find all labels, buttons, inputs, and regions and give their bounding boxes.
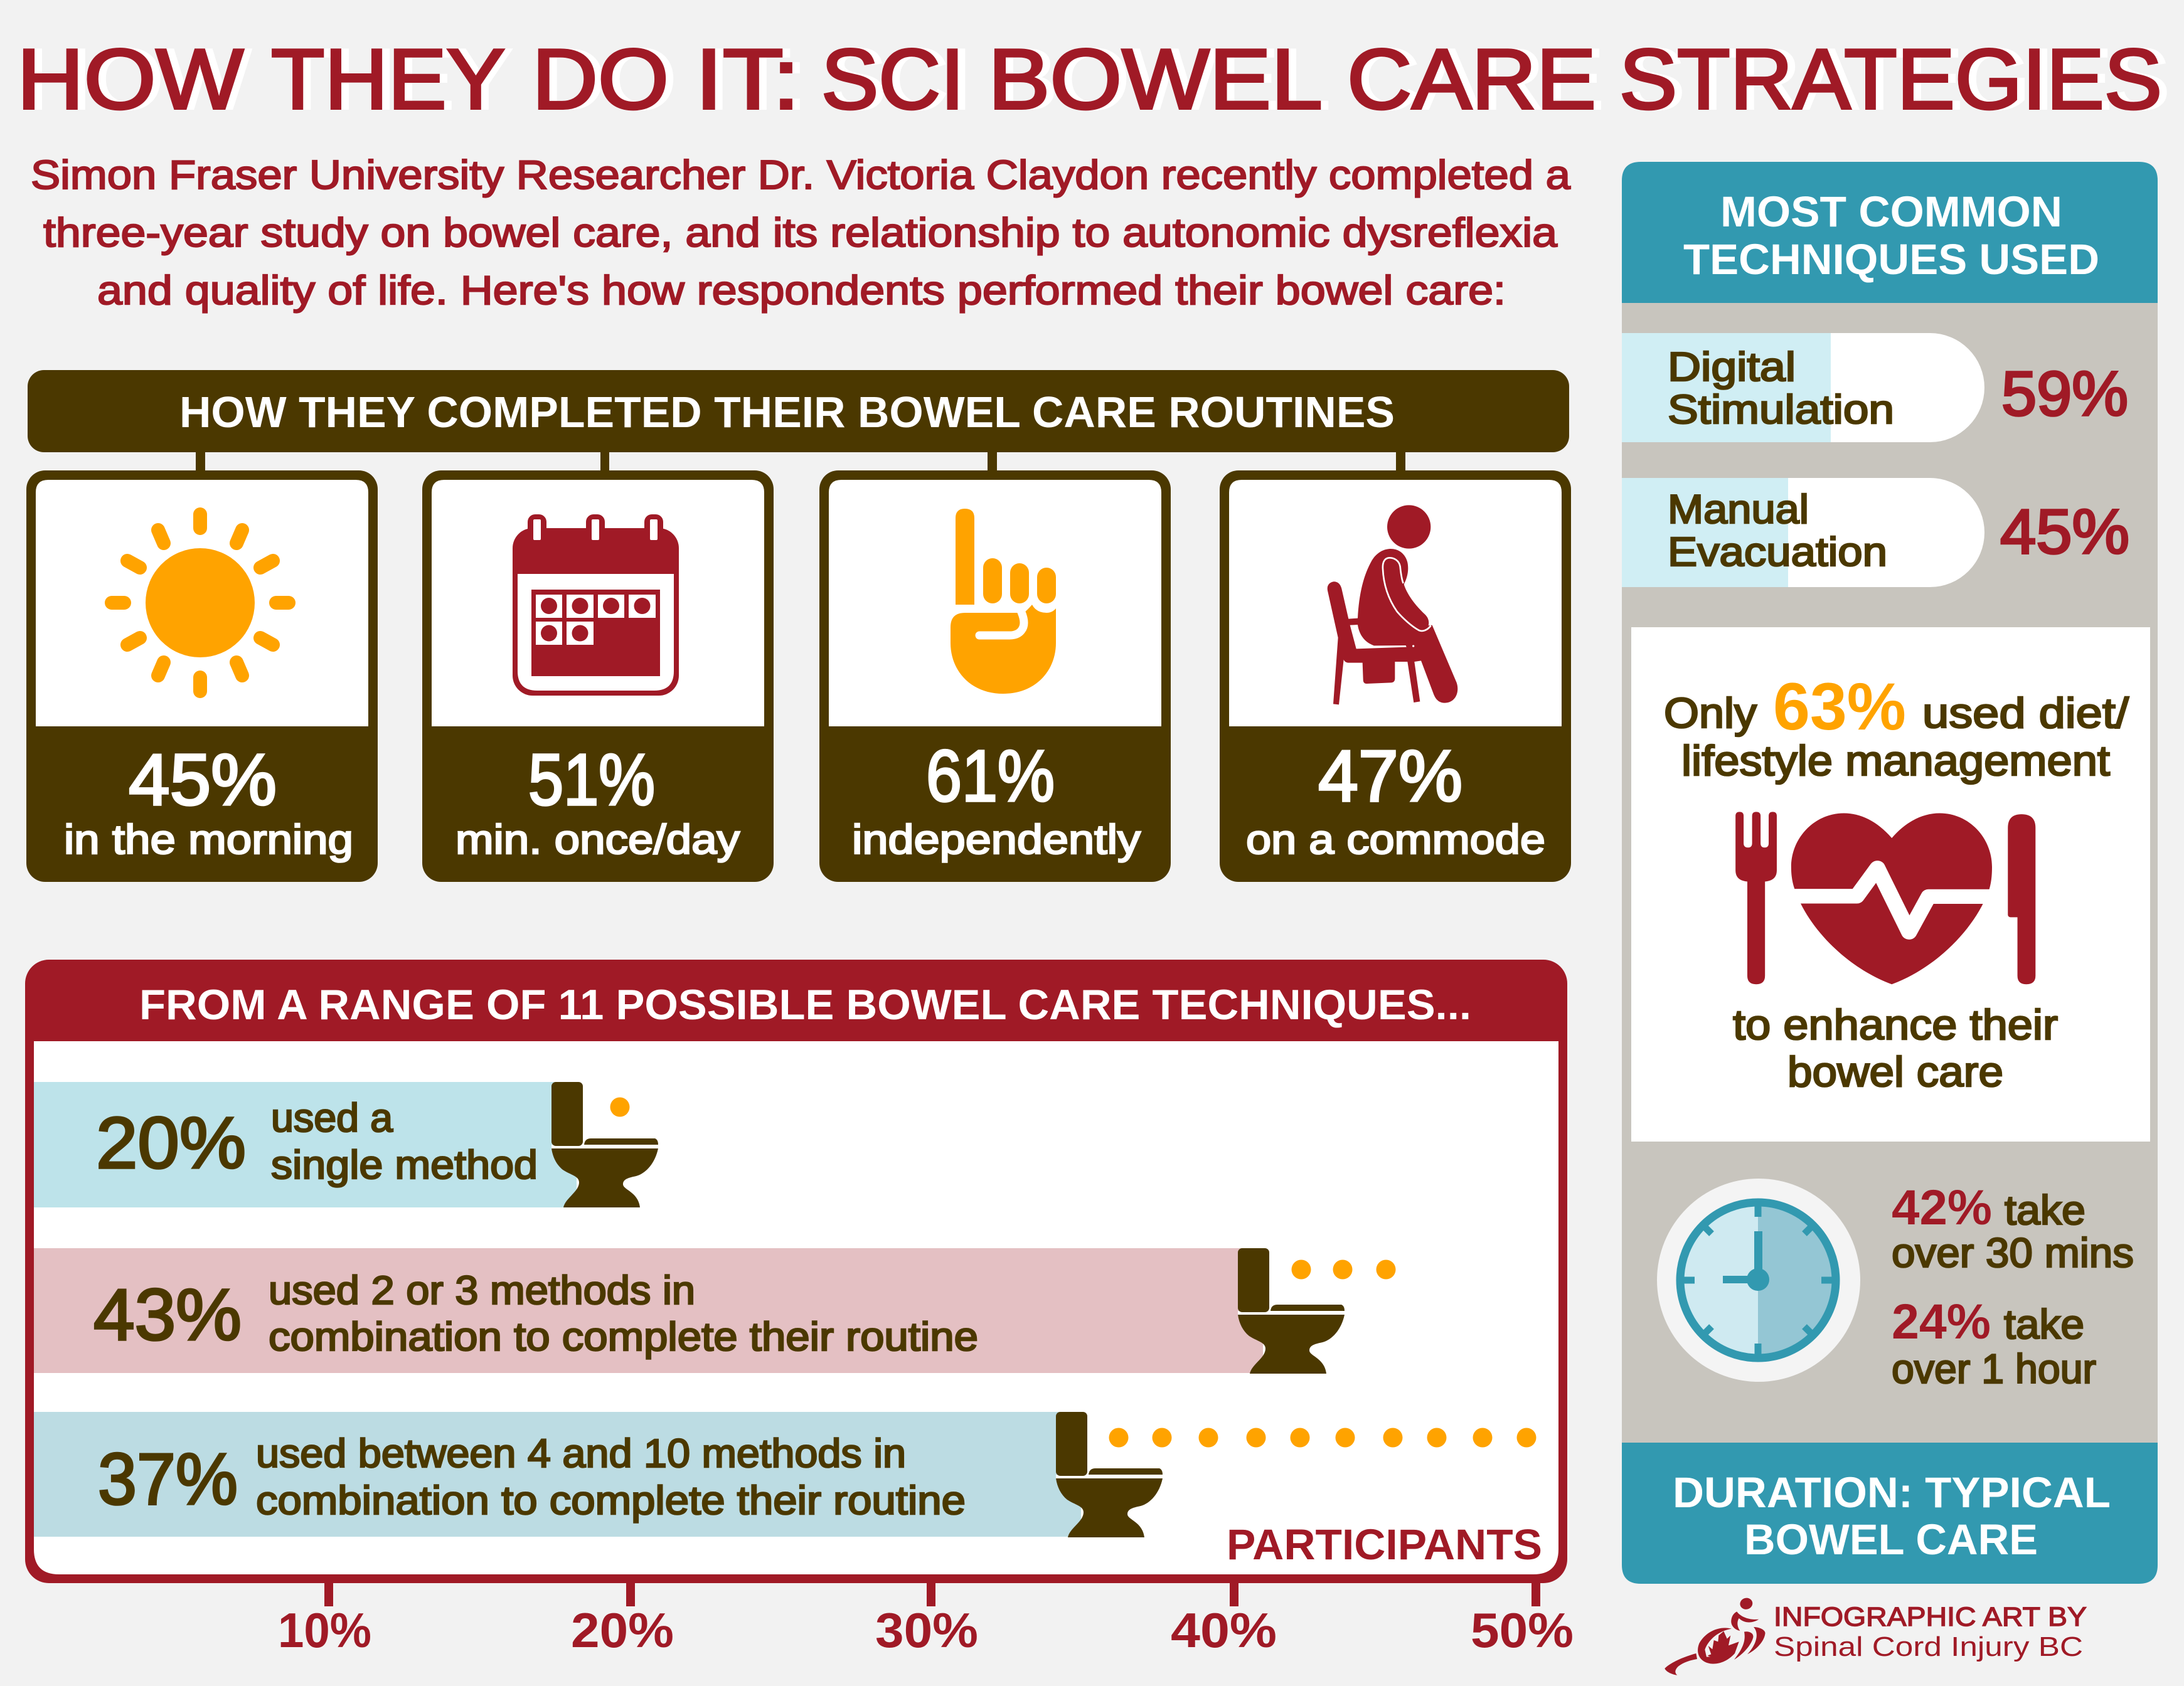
heading: duration: DURATION: TYPICAL	[1673, 1468, 2111, 1517]
text: duration stats: over 1 hour	[1892, 1345, 2096, 1392]
icon: heart with fork and knife	[1735, 812, 2035, 984]
label: on a commode: on a commode	[1246, 816, 1545, 862]
dots	[610, 1098, 630, 1116]
icon: toilet	[1056, 1412, 1163, 1537]
icon: person on commode	[1328, 505, 1457, 704]
pill: manual evacuation: Evacuation	[1668, 529, 1887, 575]
text: only 63%	[1664, 669, 2129, 785]
stat: 20%	[96, 1102, 246, 1184]
description: single method	[271, 1142, 538, 1187]
heading: duration	[1622, 1443, 2158, 1584]
label: min once per day: min. once/day	[455, 816, 740, 862]
title: CARE	[1355, 31, 1604, 127]
axis labels	[278, 1603, 1574, 1658]
text: duration stats: over 30 mins	[1892, 1229, 2134, 1276]
pill: digital stimulation	[1622, 333, 2128, 442]
intro text	[31, 152, 1571, 313]
stat: 51%: 51%	[528, 739, 655, 820]
panel: diet and lifestyle	[1631, 627, 2150, 1142]
heading: most common techniques: TECHNIQUES USED	[1683, 235, 2099, 284]
bar: 37% four to ten methods	[34, 1412, 1536, 1537]
description: used a	[271, 1095, 393, 1140]
axis labels: 20%	[571, 1603, 674, 1658]
text: spinal cord injury BC: Spinal Cord Injury BC	[1774, 1631, 2083, 1662]
pill: digital stimulation: Stimulation	[1668, 386, 1894, 432]
heading bar	[28, 370, 1569, 452]
title: THEY	[271, 31, 505, 127]
description: used between 4 and 10 methods in	[256, 1431, 906, 1476]
axis labels: 30%	[875, 1603, 978, 1658]
column background	[1622, 251, 2158, 1474]
panel: range of techniques chart	[25, 960, 1574, 1658]
icon: Spinal Cord Injury BC logo	[1665, 1596, 1765, 1675]
text: duration stats	[1892, 1179, 2134, 1392]
bar: 43% two or three methods	[34, 1248, 1395, 1374]
dots	[1109, 1428, 1536, 1448]
axis labels: 10%	[278, 1603, 371, 1658]
stat: 45%: 45%	[2000, 497, 2129, 567]
card: independently	[819, 470, 1171, 882]
panel: how they completed routines	[26, 370, 1571, 882]
title	[17, 31, 2170, 127]
text: duration stats: 24%	[1892, 1293, 1991, 1349]
axis labels: 40%	[1171, 1603, 1277, 1658]
text: only 63%: lifestyle management	[1681, 737, 2110, 785]
pill: manual evacuation: Manual	[1668, 486, 1809, 532]
description: combination to complete their routine	[269, 1314, 978, 1359]
icon: clock	[1657, 1179, 1860, 1382]
description	[269, 1268, 978, 1359]
title: SCI	[821, 31, 964, 127]
panel: right column	[1622, 162, 2158, 1584]
title: STRATEGIES	[1619, 31, 2162, 127]
description: combination to complete their routine	[256, 1478, 966, 1523]
connector bars	[196, 448, 1405, 474]
title: DO	[540, 31, 676, 127]
title: STRATEGIES	[1627, 31, 2170, 127]
title: BOWEL	[988, 31, 1323, 127]
intro text: and quality of life. Here's how respondents performed their bowel care:	[97, 267, 1506, 313]
intro text: three-year study on bowel care, and its relationship to autonomic dysreflexia	[43, 209, 1558, 255]
heading: most common techniques	[1622, 162, 2158, 303]
frame	[25, 960, 1567, 1583]
stat: 45%: 45%	[129, 739, 277, 820]
text: only 63%: 63%	[1773, 669, 1906, 744]
text: to enhance their bowel care: to enhance their	[1733, 1001, 2058, 1049]
label: in the morning: in the morning	[64, 816, 353, 862]
icon: toilet	[551, 1082, 658, 1207]
text: only 63%: Only	[1664, 689, 1757, 737]
title: BOWEL	[996, 31, 1330, 127]
text: to enhance their bowel care	[1733, 1001, 2058, 1096]
plot area	[34, 1041, 1558, 1574]
pill: manual evacuation	[1622, 478, 2129, 587]
title: THEY	[279, 31, 513, 127]
text: duration stats: 42%	[1892, 1179, 1992, 1235]
title: IT:	[695, 31, 800, 127]
text: duration stats: take	[2004, 1301, 2084, 1347]
title: CARE	[1347, 31, 1596, 127]
bar: 20% single method	[34, 1082, 658, 1207]
title: HOW	[24, 31, 251, 127]
heading: most common techniques: MOST COMMON	[1720, 188, 2062, 236]
intro text: Simon Fraser University Researcher Dr. Victoria Claydon recently completed a	[31, 152, 1571, 198]
card: once per day	[422, 470, 774, 882]
stat: 59%: 59%	[2001, 359, 2128, 429]
stat: 37%	[98, 1438, 238, 1520]
axis ticks	[324, 1577, 1540, 1606]
icon: toilet	[1238, 1248, 1345, 1374]
axis labels: 50%	[1471, 1603, 1574, 1658]
icon: calendar	[513, 514, 679, 696]
credit	[1665, 1596, 2087, 1675]
text: only 63%: used diet/	[1922, 689, 2129, 737]
label: independently: independently	[852, 816, 1141, 862]
description: used 2 or 3 methods in	[269, 1268, 695, 1313]
stat: 43%	[93, 1274, 242, 1355]
card: in the morning	[26, 470, 378, 882]
title: HOW	[17, 31, 243, 127]
description	[271, 1095, 538, 1187]
icon: sun	[112, 514, 289, 691]
text: duration stats: take	[2005, 1187, 2085, 1233]
heading: duration: BOWEL CARE	[1744, 1515, 2038, 1564]
title: IT:	[703, 31, 807, 127]
title: DO	[532, 31, 669, 127]
title: SCI	[829, 31, 972, 127]
heading: FROM A RANGE OF 11 POSSIBLE BOWEL CARE TECHNIQUES...	[139, 981, 1471, 1029]
heading bar: HOW THEY COMPLETED THEIR BOWEL CARE ROUTINES	[179, 388, 1395, 437]
dots	[1291, 1259, 1395, 1280]
text: to enhance their bowel care: bowel care	[1787, 1048, 2003, 1096]
stat: 47%: 47%	[1318, 735, 1462, 817]
text: infographic art by: INFOGRAPHIC ART BY	[1774, 1602, 2087, 1632]
stat: 61%: 61%	[926, 735, 1055, 817]
card: on a commode	[1220, 470, 1571, 882]
description	[256, 1431, 966, 1523]
axis title: participants: PARTICIPANTS	[1227, 1520, 1542, 1569]
icon: hand pointing	[951, 509, 1056, 694]
pill: digital stimulation: Digital	[1668, 344, 1796, 390]
